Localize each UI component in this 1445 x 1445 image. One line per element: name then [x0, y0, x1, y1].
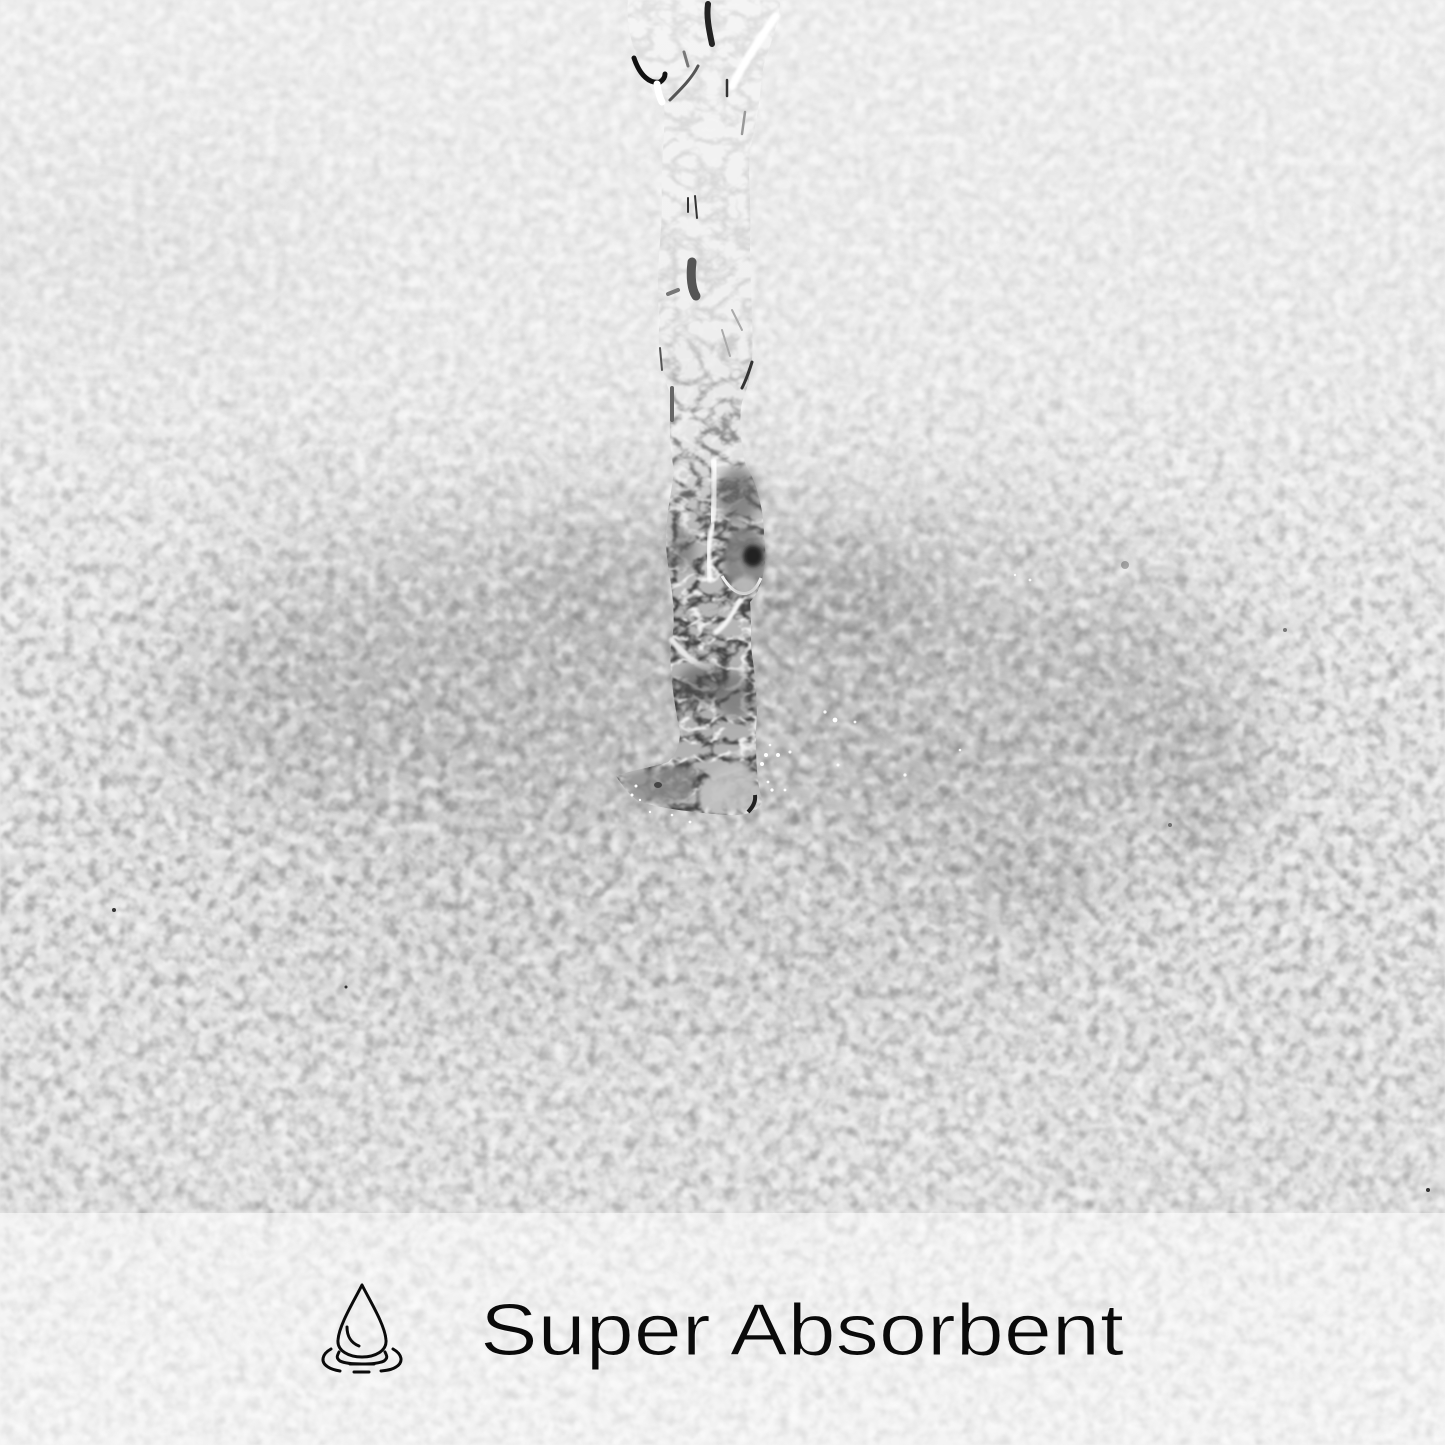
banner panel — [0, 1213, 1445, 1445]
caption text: Super Absorbent — [480, 1290, 1124, 1371]
splash sparkles — [630, 718, 837, 823]
stream highlights and dark refractions — [634, 4, 776, 668]
icon: water drop with ripples — [323, 1285, 401, 1372]
caption banner — [0, 1213, 1445, 1445]
water stream pouring onto the fabric — [600, 0, 837, 830]
stream body — [616, 0, 780, 816]
water bulges — [654, 467, 766, 812]
